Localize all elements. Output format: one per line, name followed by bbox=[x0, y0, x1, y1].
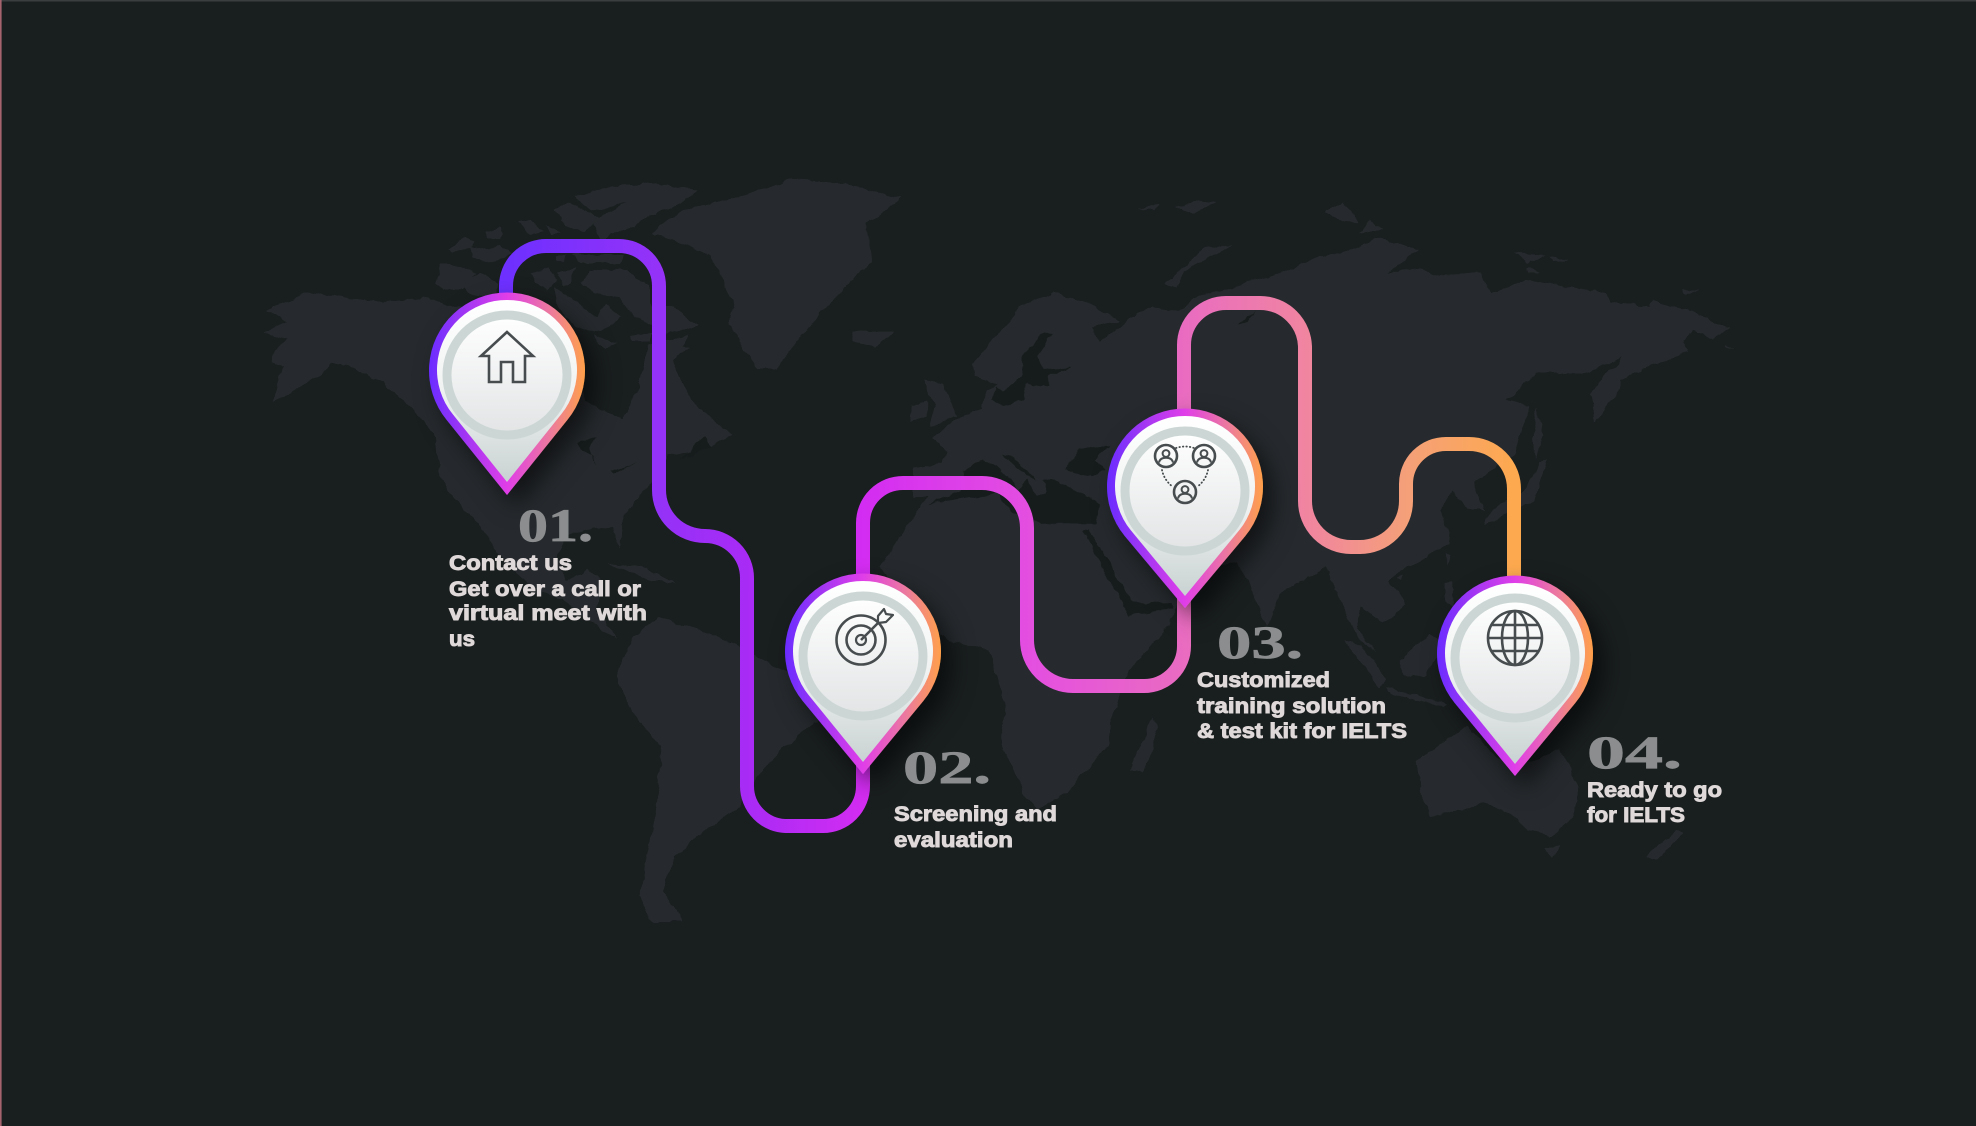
pin 2 bbox=[785, 574, 941, 774]
pin 4 bbox=[1437, 576, 1593, 776]
step 2 description: Screening and bbox=[894, 803, 1057, 826]
step 4 description: Ready to go bbox=[1587, 779, 1722, 802]
icon: connected people bbox=[1155, 445, 1215, 503]
step 1 number: 01. bbox=[518, 500, 593, 552]
step 2 description bbox=[894, 803, 1057, 852]
step 2 description: evaluation bbox=[894, 829, 1013, 852]
step 3 description bbox=[1197, 669, 1407, 743]
step 1 description: us bbox=[449, 628, 475, 651]
step 1 description: Contact us bbox=[449, 552, 572, 575]
step 1 description: Get over a call or bbox=[449, 578, 641, 601]
icon: globe bbox=[1488, 611, 1542, 665]
step 2 number: 02. bbox=[903, 742, 991, 794]
step 1 description: virtual meet with bbox=[449, 602, 647, 625]
step 4 description: for IELTS bbox=[1587, 804, 1685, 827]
world map bbox=[262, 180, 1735, 921]
step 3 description: & test kit for IELTS bbox=[1197, 720, 1407, 743]
step 1 description bbox=[449, 552, 647, 651]
pin 1 bbox=[429, 293, 585, 495]
winding gradient route bbox=[506, 246, 1514, 826]
pin 3 bbox=[1107, 409, 1263, 608]
step 4 number: 04. bbox=[1587, 727, 1682, 779]
step 3 description: Customized bbox=[1197, 669, 1330, 692]
step 3 description: training solution bbox=[1197, 695, 1386, 718]
icon: house bbox=[481, 332, 533, 382]
step 4 description bbox=[1587, 779, 1722, 827]
step 3 number: 03. bbox=[1217, 617, 1303, 669]
icon: target with arrow bbox=[836, 609, 893, 664]
